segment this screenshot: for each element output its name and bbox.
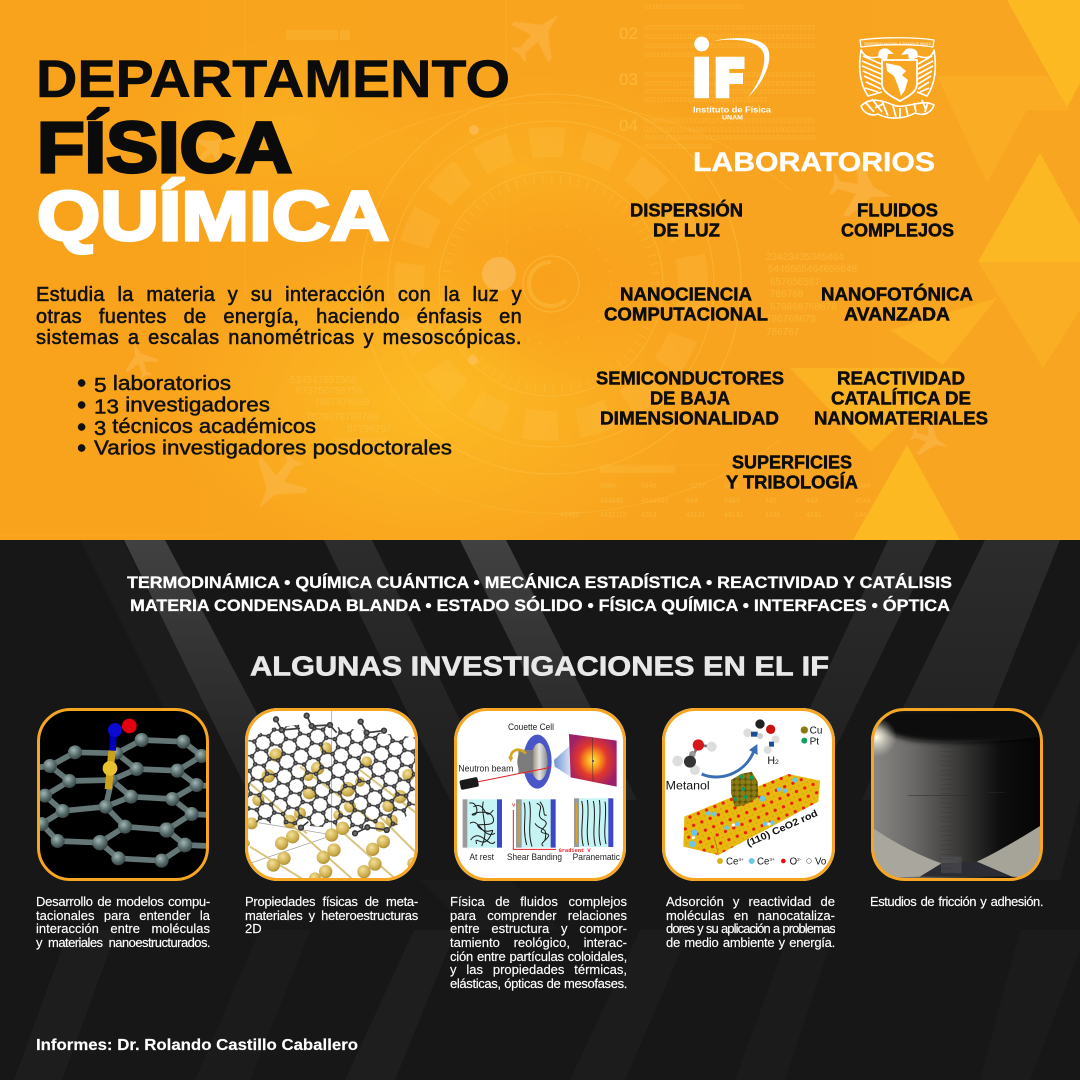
decorative data table: 443 <box>815 483 827 490</box>
card: Couette cell neutron scattering diagram: At rest <box>469 852 494 862</box>
lab: Nanofotónica avanzada <box>821 284 973 324</box>
decorative data table: 43131 <box>686 512 706 519</box>
lab: Semiconductores de baja dimensionalidad: DE BAJA <box>650 388 730 408</box>
decorative section numbers: 02 <box>619 24 638 43</box>
card: CeO2 nanorod catalyst: 3+ <box>769 857 775 862</box>
decorative binary code: 01010101010101010 <box>644 142 712 151</box>
caption: metamaterials <box>245 895 418 936</box>
caption: computational models <box>36 895 210 950</box>
lab: Reactividad catalítica de nanomateriales: CATALÍTICA DE <box>831 388 971 408</box>
rheology panels <box>463 798 613 854</box>
decorative number columns: 786768678 <box>766 314 816 325</box>
decorative data table: 4131 <box>765 512 781 519</box>
decorative data table: 6737 <box>690 483 706 490</box>
lab: Semiconductores de baja dimensionalidad <box>596 368 784 428</box>
decorative number columns: 786767 <box>766 327 800 338</box>
decorative number columns: 87798797 <box>347 424 392 435</box>
card: CeO2 nanorod catalyst: Pt <box>810 736 819 747</box>
research topics <box>127 573 952 615</box>
lab: Nanofotónica avanzada: AVANZADA <box>844 304 950 324</box>
lab: Fluidos complejos <box>841 200 954 240</box>
lab: Reactividad catalítica de nanomateriales: REACTIVIDAD <box>837 368 965 388</box>
decorative data table: 464645 <box>600 498 623 505</box>
card: Couette cell neutron scattering diagram: Couette Cell <box>508 722 554 732</box>
decorative binary code: 0101010101010101010101010010101010101010101 <box>644 41 816 50</box>
decorative data table: 4131 <box>806 512 822 519</box>
card: CeO2 nanorod catalyst: (110) CeO2 rod <box>745 808 820 849</box>
card: CeO2 nanorod catalyst: Cu <box>810 726 822 737</box>
decorative number columns: 786768 <box>770 289 804 300</box>
bulleted facts list: 3 <box>94 417 106 440</box>
decorative number columns <box>290 252 857 448</box>
lab: Semiconductores de baja dimensionalidad: SEMICONDUCTORES <box>596 368 784 388</box>
lab names grid <box>596 200 988 492</box>
decorative data table <box>560 483 871 519</box>
decorative number columns: 534547657568 <box>290 375 357 386</box>
decorative number columns: 5446565464656646 <box>768 264 857 275</box>
card: CeO2 nanorod catalyst: Vo <box>815 856 826 867</box>
decorative data table: 4544645 <box>641 498 668 505</box>
logo: Instituto de Física: UNAM <box>722 116 743 122</box>
lab: Fluidos complejos: FLUIDOS <box>857 200 938 220</box>
decorative binary code: 0101101101010 <box>644 50 695 59</box>
decorative data table: 5464 <box>600 483 616 490</box>
decorative binary code: 0101010101010100110101010010101010101010101 <box>644 70 815 79</box>
decorative data table: 443 <box>806 498 818 505</box>
decorative binary code: 0101010101010100110101010010101010101010101 <box>644 116 815 125</box>
decorative binary code: 0101010110101000101010101010101011000101010 <box>644 79 815 88</box>
card: CeO2 nanorod catalyst: 4+ <box>738 857 744 862</box>
card: CeO2 nanorod catalyst: Metanol <box>666 779 710 792</box>
decorative binary code: 0110110101010101010101010 <box>644 2 743 11</box>
decorative number columns: 675756756756 <box>296 386 363 397</box>
decorative binary code: 0101010101010101010101010010101010101010101 <box>644 87 816 96</box>
bulleted facts list: técnicos académicos <box>106 415 316 438</box>
decorative data table: 4544 <box>855 498 871 505</box>
decorative data table: 4432113 <box>600 512 627 519</box>
logo: UNAM crest <box>860 38 935 118</box>
decorative section numbers: 03 <box>619 70 638 89</box>
card: friction and adhesion photograph <box>857 708 1043 881</box>
decorative binary code: 0101010110101000101010101010101011000101010 <box>644 125 815 134</box>
research topics: TERMODINÁMICA • QUÍMICA CUÁNTICA • MECÁNICA ESTADÍSTICA • REACTIVIDAD Y CATÁLISIS <box>127 573 952 592</box>
card: CeO2 nanorod catalyst: Ce <box>757 856 769 867</box>
lab: Fluidos complejos: COMPLEJOS <box>841 220 954 240</box>
card: Couette cell neutron scattering diagram <box>454 708 626 881</box>
decorative data table: 644 <box>855 512 867 519</box>
bulleted facts list <box>78 372 452 460</box>
card: Couette cell neutron scattering diagram: Neutron beam <box>458 764 514 774</box>
card: molecular model on graphene <box>30 708 209 881</box>
lab: Superficies y tribología: Y TRIBOLOGÍA <box>726 472 858 492</box>
lab: Dispersión de luz: DISPERSIÓN <box>630 200 743 220</box>
research topics: MATERIA CONDENSADA BLANDA • ESTADO SÓLIDO • FÍSICA QUÍMICA • INTERFACES • ÓPTICA <box>130 596 950 615</box>
decorative number columns: 7867886976 <box>333 437 389 448</box>
card: CeO2 nanorod catalyst <box>662 708 835 881</box>
heading: LABORATORIOS: LABORATORIOS <box>693 147 935 177</box>
lab: Reactividad catalítica de nanomateriales: NANOMATERIALES <box>814 408 988 428</box>
decorative data table: 43131 <box>724 512 744 519</box>
decorative binary code <box>644 2 816 151</box>
decorative data table: 5446 <box>641 483 657 490</box>
bulleted facts list: laboratorios <box>107 372 231 395</box>
card: CeO2 nanorod catalyst: H2 <box>767 755 779 767</box>
lab: Nanociencia computacional: NANOCIENCIA <box>620 284 752 304</box>
rheology panels: Gradient V <box>559 848 591 854</box>
bulleted facts list: Varios investigadores posdoctorales <box>94 436 452 460</box>
decorative data table: 5464 <box>724 498 740 505</box>
decorative data table: 6446 <box>724 483 740 490</box>
decorative data table: 4313 <box>641 512 657 519</box>
bulleted facts list: 13 <box>94 396 119 418</box>
decorative number columns: 678668768676 <box>770 302 837 313</box>
card: Couette cell neutron scattering diagram: Paranematic <box>573 852 620 862</box>
decorative binary code: 0101010101010100110101010010101010101010101 <box>644 23 815 32</box>
card: CeO2 nanorod catalyst: 2- <box>797 857 802 862</box>
bulleted facts list: investigadores <box>119 394 270 416</box>
title: DEPARTAMENTO FÍSICA QUÍMICA: FÍSICA <box>37 109 292 188</box>
lab: Reactividad catalítica de nanomateriales <box>814 368 988 428</box>
lab: Superficies y tribología <box>726 452 858 492</box>
footer contact: Informes: Dr. Rolando Castillo Caballero <box>36 1037 358 1054</box>
logo: Instituto de Física <box>693 37 771 122</box>
lab: Superficies y tribología: SUPERFICIES <box>732 452 852 472</box>
decorative data table: 445 <box>765 498 777 505</box>
logo: Instituto de Física: Instituto de Física <box>693 104 771 114</box>
card: Couette cell neutron scattering diagram: Shear Banding <box>507 852 562 862</box>
decorative number columns: 657656567 <box>770 277 820 288</box>
heading: ALGUNAS INVESTIGACIONES EN EL IF: ALGUNAS INVESTIGACIONES EN EL IF <box>250 650 829 682</box>
decorative data table: 4544 <box>855 483 871 490</box>
caption: complex fluids <box>450 895 627 991</box>
lab: Dispersión de luz <box>630 200 743 240</box>
decorative data table: 45465 <box>560 512 580 519</box>
title: DEPARTAMENTO FÍSICA QUÍMICA <box>36 50 510 255</box>
lab: Nanociencia computacional <box>604 284 768 324</box>
decorative binary code: 0101101010101010101010101010101 <box>644 95 767 104</box>
lab: Nanofotónica avanzada: NANOFOTÓNICA <box>821 284 973 304</box>
card: CeO2 nanorod catalyst: Ce <box>726 856 738 867</box>
lab: Dispersión de luz: DE LUZ <box>653 220 720 240</box>
decorative data table: 644 <box>686 498 698 505</box>
bulleted facts list: 5 <box>94 374 107 397</box>
decorative number columns: 23423435345464 <box>766 252 844 263</box>
logo: UNAM crest: UNIVERSIDAD NACIONAL AUTONOMA DE MEXICO <box>864 42 931 46</box>
lab: Semiconductores de baja dimensionalidad: DIMENSIONALIDAD <box>600 408 779 428</box>
card: 2D heterostructure lattice <box>243 708 420 884</box>
rheology panels: V <box>512 803 516 809</box>
decorative section numbers <box>620 28 638 131</box>
panel: dark lower background <box>0 540 1080 1080</box>
title: DEPARTAMENTO FÍSICA QUÍMICA: DEPARTAMENTO <box>36 50 510 109</box>
decorative data table: 5464 <box>765 483 781 490</box>
decorative binary code: 0101010110101000101010101010101011000101010 <box>644 32 815 41</box>
panel: orange header background <box>0 0 1080 570</box>
title: DEPARTAMENTO FÍSICA QUÍMICA: QUÍMICA <box>37 177 389 255</box>
decorative binary code: 0101010101010101010101010010101010101010101 <box>644 133 816 142</box>
decorative number columns: 7878678789789 <box>306 412 379 423</box>
decorative number columns: 7867876889 <box>314 397 370 408</box>
department description <box>36 285 522 349</box>
caption: nanocatalysts <box>666 895 835 950</box>
decorative section numbers: 04 <box>619 116 638 135</box>
lab: Nanociencia computacional: COMPUTACIONAL <box>604 304 768 324</box>
card: CeO2 nanorod catalyst: O <box>790 856 797 867</box>
